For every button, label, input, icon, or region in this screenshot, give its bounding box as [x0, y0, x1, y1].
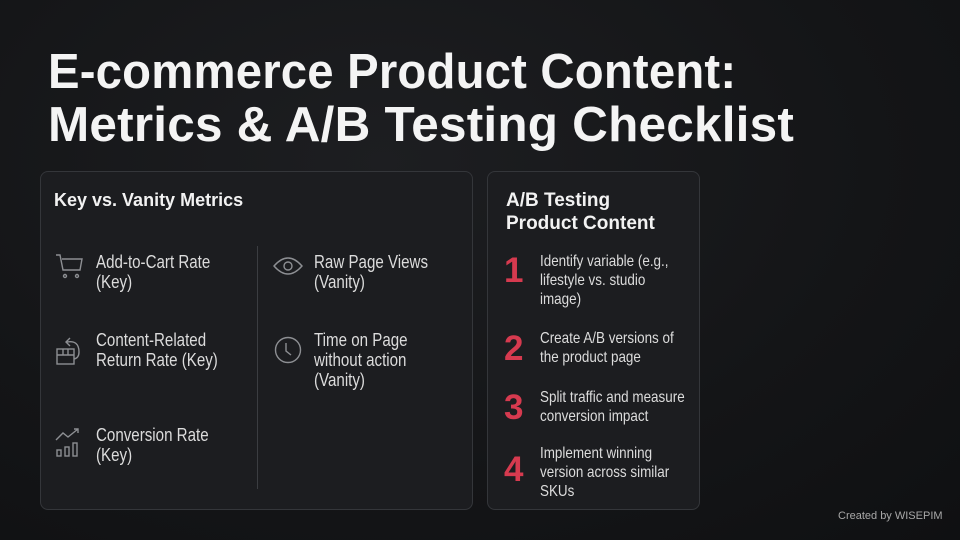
text: conversion — [96, 425, 209, 465]
text: conversion: Conversion Rate — [96, 425, 209, 445]
heading: A/B Testing — [506, 190, 610, 211]
panel: key vs vanity metrics — [40, 171, 473, 510]
step 2: Create A/B versions of — [540, 330, 674, 347]
text: time on page: (Vanity) — [314, 370, 365, 390]
text: conversion: (Key) — [96, 445, 132, 465]
panel: A/B testing — [487, 171, 700, 510]
icon: return box — [56, 338, 80, 365]
footer credit: Created by WISEPIM — [838, 510, 943, 522]
step 4: SKUs — [540, 483, 574, 500]
step 2: the product page — [540, 349, 641, 366]
icon: clock — [274, 336, 302, 364]
text: return rate: Return Rate (Key) — [96, 350, 218, 370]
text: add-to-cart: Add-to-Cart Rate — [96, 252, 210, 272]
text: return rate — [96, 330, 218, 370]
step 4: 4 — [504, 450, 523, 489]
icon: chart — [56, 428, 79, 457]
step 2 — [504, 329, 674, 368]
title: Metrics & A/B Testing Checklist — [48, 98, 794, 152]
text: page views: Raw Page Views — [314, 252, 428, 272]
step 1: 1 — [504, 251, 523, 290]
text: time on page: Time on Page — [314, 330, 408, 350]
step 1: lifestyle vs. studio — [540, 272, 645, 289]
step 3: Split traffic and measure — [540, 389, 685, 406]
step 4: version across similar — [540, 464, 669, 481]
text: page views: (Vanity) — [314, 272, 365, 292]
step 4: Implement winning — [540, 445, 652, 462]
step 3: conversion impact — [540, 408, 648, 425]
step 1: Identify variable (e.g., — [540, 253, 668, 270]
text: add-to-cart — [96, 252, 210, 292]
text: return rate: Content-Related — [96, 330, 206, 350]
text: time on page — [314, 330, 408, 390]
text: page views — [314, 252, 428, 292]
step 1: image) — [540, 291, 581, 308]
icon: cart — [56, 254, 83, 278]
icon: eye — [273, 257, 303, 275]
text: add-to-cart: (Key) — [96, 272, 132, 292]
step 2: 2 — [504, 329, 523, 368]
title — [48, 45, 794, 152]
step 3 — [504, 388, 685, 427]
step 1 — [504, 251, 668, 308]
title: E-commerce Product Content: — [48, 45, 736, 99]
step 4 — [504, 445, 669, 500]
heading — [506, 190, 655, 234]
heading: Key vs. Vanity Metrics — [54, 190, 243, 210]
text: time on page: without action — [314, 350, 406, 370]
step 3: 3 — [504, 388, 523, 427]
heading: Product Content — [506, 213, 655, 234]
